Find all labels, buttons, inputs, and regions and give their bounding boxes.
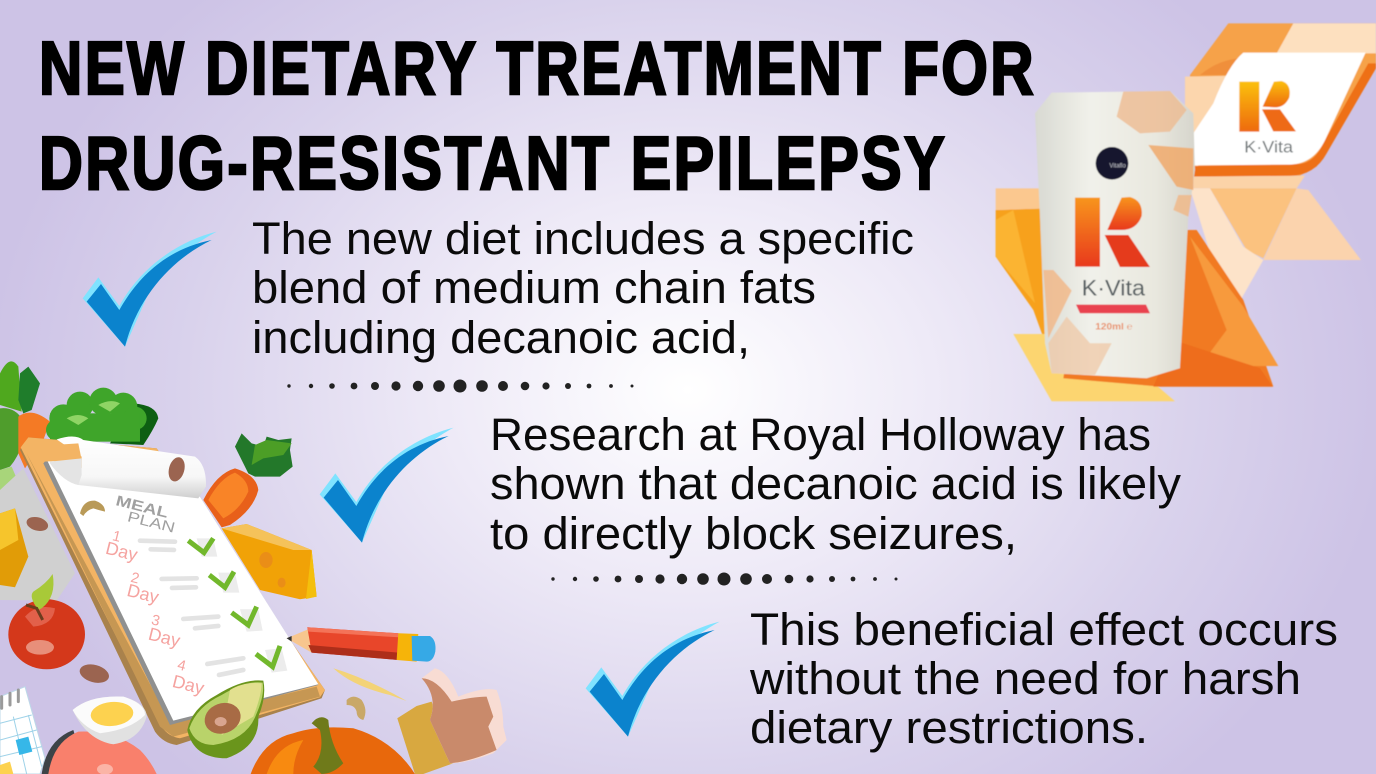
text block: medium chain fats: The new diet includes a specific xyxy=(252,213,914,264)
day 3 row: Day xyxy=(146,624,182,651)
wheat xyxy=(333,668,407,701)
text block: medium chain fats: including decanoic acid, xyxy=(252,312,750,363)
day 4 row: Day xyxy=(170,671,206,698)
icon: check mark 1 xyxy=(83,232,217,347)
text block: beneficial effect: without the need for harsh xyxy=(749,653,1301,704)
apple xyxy=(8,574,85,669)
day 1 row: Day xyxy=(104,538,140,565)
leafy greens xyxy=(0,361,40,500)
title: NEW DIETARY TREATMENT FOR xyxy=(39,26,1036,110)
cashew xyxy=(80,501,105,516)
pouch K xyxy=(1075,197,1150,267)
paper curl xyxy=(50,436,206,498)
cheese wedge xyxy=(222,524,317,599)
logo card xyxy=(1193,53,1366,165)
icon: check mark 2 xyxy=(320,428,454,543)
day 3 row: 3 xyxy=(150,612,161,630)
calendar xyxy=(0,687,45,774)
clipboard: PLAN xyxy=(126,509,176,537)
text block: Royal Holloway research: to directly block seizures, xyxy=(490,508,1017,559)
text block: beneficial effect: dietary restrictions. xyxy=(750,702,1148,753)
pouch volume: 120ml ℮ xyxy=(1095,321,1133,331)
paper xyxy=(43,459,318,725)
grey backing sheet xyxy=(0,468,75,601)
title xyxy=(39,26,1036,205)
text block: beneficial effect xyxy=(749,604,1338,753)
day 4 row: 4 xyxy=(176,657,187,675)
title: DRUG-RESISTANT EPILEPSY xyxy=(39,121,947,205)
day 1 row: 1 xyxy=(111,528,122,546)
text block: beneficial effect: This beneficial effect occurs xyxy=(750,604,1338,655)
text block: Royal Holloway research xyxy=(490,409,1182,559)
carrot xyxy=(203,433,293,527)
text block: Royal Holloway research: shown that decanoic acid is likely xyxy=(490,458,1182,509)
broccoli xyxy=(46,388,158,445)
day 3 row xyxy=(146,607,263,651)
pouch orange reflections xyxy=(1043,91,1193,375)
pouch red bar xyxy=(1076,305,1150,313)
carrot behind xyxy=(18,413,50,468)
pouch badge xyxy=(1096,147,1128,180)
meal plan heading: MEAL xyxy=(114,493,170,522)
illustration: meal plan and food xyxy=(0,361,507,774)
egg xyxy=(73,696,147,744)
day 1 row xyxy=(104,528,217,565)
logo name: K·Vita xyxy=(1244,137,1294,156)
pouch xyxy=(1035,91,1195,378)
icon: check mark 3 xyxy=(586,622,720,737)
almond xyxy=(78,661,111,686)
pencil xyxy=(287,627,436,662)
pouch name: K·Vita xyxy=(1082,276,1146,301)
pouch badge: Vitaflo xyxy=(1109,164,1127,170)
product: K-Vita pouch and logo xyxy=(996,23,1376,401)
day 2 row: 2 xyxy=(129,570,141,587)
day 4 row xyxy=(170,646,287,698)
cashew xyxy=(347,697,365,720)
pumpkin xyxy=(251,717,415,774)
cheese left xyxy=(0,508,28,587)
thumbs up xyxy=(397,668,507,774)
salmon xyxy=(42,730,157,774)
dotted separator 2 xyxy=(551,572,898,586)
text block: medium chain fats xyxy=(252,213,914,363)
avocado xyxy=(187,680,264,758)
text block: Royal Holloway research: Research at Royal Holloway has xyxy=(490,409,1151,460)
clipboard xyxy=(20,436,325,745)
almond left xyxy=(25,515,50,533)
text block: medium chain fats: blend of medium chain fats xyxy=(252,262,816,313)
day 2 row: Day xyxy=(125,580,161,607)
dotted separator 1 xyxy=(287,380,634,392)
day 2 row xyxy=(125,570,239,607)
orange background shapes xyxy=(996,23,1376,401)
logo K xyxy=(1239,81,1296,132)
